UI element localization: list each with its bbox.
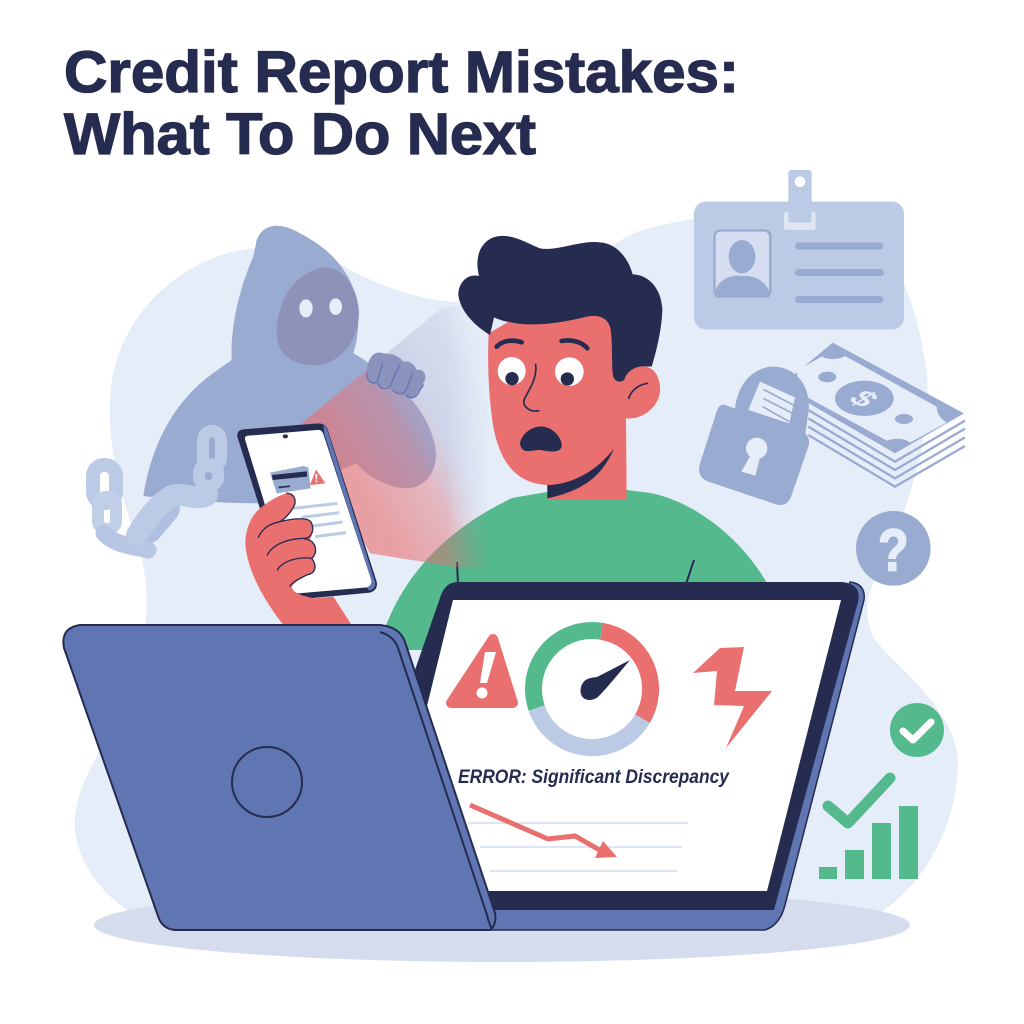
man head xyxy=(458,236,662,500)
lid side edge xyxy=(380,632,492,929)
hooded thief xyxy=(143,226,436,503)
speedometer gauge xyxy=(534,631,651,748)
lightning bolt xyxy=(693,647,772,748)
chain xyxy=(93,431,221,550)
laptop lid back xyxy=(63,625,495,930)
phone screen xyxy=(245,430,371,593)
floor shadow ellipse xyxy=(94,888,910,962)
banknote face xyxy=(797,356,947,443)
thief eyes xyxy=(299,298,342,317)
papers in shackle xyxy=(748,382,795,423)
bars xyxy=(819,806,918,879)
phone text lines xyxy=(293,503,346,537)
error text: ERROR: Significant Discrepancy xyxy=(458,767,730,788)
nose xyxy=(524,364,539,411)
icons on the right xyxy=(694,170,965,586)
money stack xyxy=(780,343,965,487)
hood face xyxy=(277,267,359,365)
keyhole xyxy=(741,438,767,476)
background blob xyxy=(75,212,958,930)
ear line xyxy=(629,383,647,398)
check badge xyxy=(890,703,944,757)
chin shadow xyxy=(547,448,614,498)
phone card xyxy=(270,466,311,493)
hood and body xyxy=(143,226,436,503)
green shirt xyxy=(385,490,770,650)
shirt fold lines xyxy=(457,560,694,584)
phone body xyxy=(237,423,377,599)
big check xyxy=(828,778,890,823)
falling trend arrow xyxy=(470,805,617,858)
banknote seal xyxy=(835,381,894,416)
gauge needle xyxy=(581,660,630,700)
hand xyxy=(245,493,352,625)
laptop white screen xyxy=(427,600,841,891)
green success chart xyxy=(819,703,944,879)
phone and hand xyxy=(237,423,377,625)
badge clip xyxy=(784,170,816,230)
thief fist xyxy=(367,352,425,399)
mouth xyxy=(520,426,562,451)
front laptop screen xyxy=(415,582,864,930)
camera dot xyxy=(283,434,288,438)
light beam from phone xyxy=(302,307,493,570)
question mark badge xyxy=(856,511,931,586)
lid logo circle xyxy=(232,747,302,817)
phone edge xyxy=(323,425,375,591)
badge text lines xyxy=(795,242,884,303)
laptop dark frame xyxy=(415,582,859,910)
ID badge xyxy=(694,170,904,329)
eyes xyxy=(498,357,584,386)
finger lines xyxy=(258,493,316,586)
title xyxy=(64,40,739,167)
warning triangle xyxy=(451,639,513,703)
chart grid lines xyxy=(468,823,688,871)
dollar sign: $ xyxy=(841,385,888,412)
ear xyxy=(625,366,660,418)
title: Credit Report Mistakes: xyxy=(64,40,739,105)
hair xyxy=(458,236,662,382)
face and neck xyxy=(488,303,640,500)
laptop blue edge xyxy=(490,582,864,930)
padlock xyxy=(699,367,809,505)
phone warning xyxy=(310,469,325,485)
title: What To Do Next xyxy=(64,102,536,167)
question mark badge: ? xyxy=(878,517,909,584)
badge photo xyxy=(713,229,772,298)
eyebrows xyxy=(497,340,587,348)
